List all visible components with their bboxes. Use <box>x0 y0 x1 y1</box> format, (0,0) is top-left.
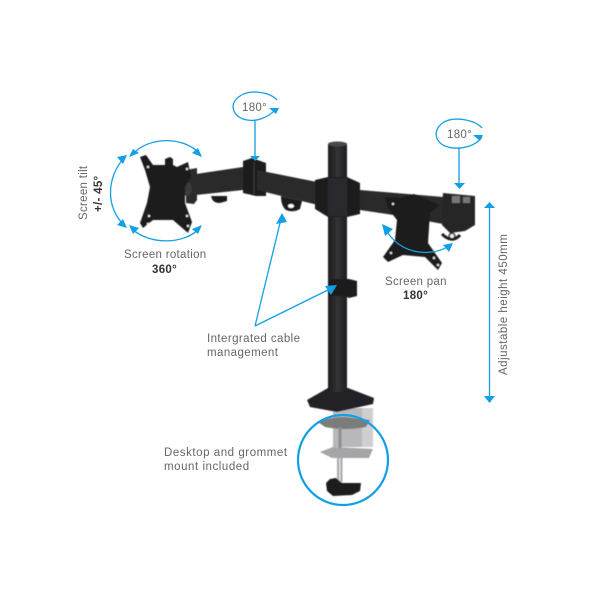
rotation callout 2 <box>436 119 483 189</box>
value: 180° <box>242 102 267 114</box>
bottom arc <box>132 228 200 241</box>
left plate holes <box>147 166 189 227</box>
arm hook <box>281 196 302 211</box>
cable clip <box>328 279 357 298</box>
screen pan arrow <box>382 224 453 252</box>
pole collar <box>315 177 360 217</box>
label: cable management: management <box>207 347 279 359</box>
label: screen pan: Screen pan <box>385 276 447 288</box>
right arm end joint <box>442 193 475 233</box>
monitor arm product <box>140 142 475 496</box>
right screen plate <box>383 194 442 270</box>
pointer head <box>454 183 465 189</box>
rotation callout 1 <box>233 92 279 161</box>
label: cable management <box>207 333 300 359</box>
clamp highlight circle <box>298 415 388 505</box>
top arc <box>132 141 200 155</box>
left screen plate <box>140 155 192 233</box>
label: mount: mount included <box>164 461 250 473</box>
label: mount <box>164 447 288 473</box>
right arm <box>360 190 443 224</box>
clamp body <box>318 408 373 482</box>
label: adjustable height: Adjustable height 450mm <box>498 234 510 375</box>
pole top <box>328 142 347 146</box>
adjustable height arrow <box>484 202 495 403</box>
value: 180° <box>447 129 472 141</box>
label: mount: Desktop and grommet <box>164 447 288 459</box>
left arc <box>110 158 124 225</box>
pointer head <box>250 156 260 161</box>
label: screen tilt: +/- 45° <box>93 175 105 212</box>
cable management arrows <box>255 213 337 326</box>
left arm <box>196 167 243 195</box>
label: screen rotation: Screen rotation <box>124 249 206 261</box>
label: screen tilt <box>78 165 105 220</box>
middle joint <box>243 158 266 196</box>
screen tilt arrows <box>110 141 202 241</box>
arrowhead <box>473 135 483 141</box>
label: screen tilt: Screen tilt <box>78 165 90 220</box>
label: screen pan: 180° <box>403 290 428 302</box>
label: cable management: Intergrated cable <box>207 333 300 345</box>
pointer <box>458 148 460 183</box>
pole <box>328 144 347 392</box>
label: screen rotation <box>124 249 206 276</box>
ring <box>436 119 482 148</box>
base <box>307 388 374 412</box>
label: screen rotation: 360° <box>152 264 177 276</box>
left hook <box>211 194 227 203</box>
clamp knob <box>326 478 361 496</box>
arrowhead <box>269 108 279 114</box>
right plate holes <box>390 203 439 266</box>
pointer <box>254 120 256 156</box>
left plate joint <box>186 168 197 204</box>
label: screen pan <box>385 276 447 302</box>
ring <box>233 92 277 120</box>
second arm <box>257 170 322 206</box>
